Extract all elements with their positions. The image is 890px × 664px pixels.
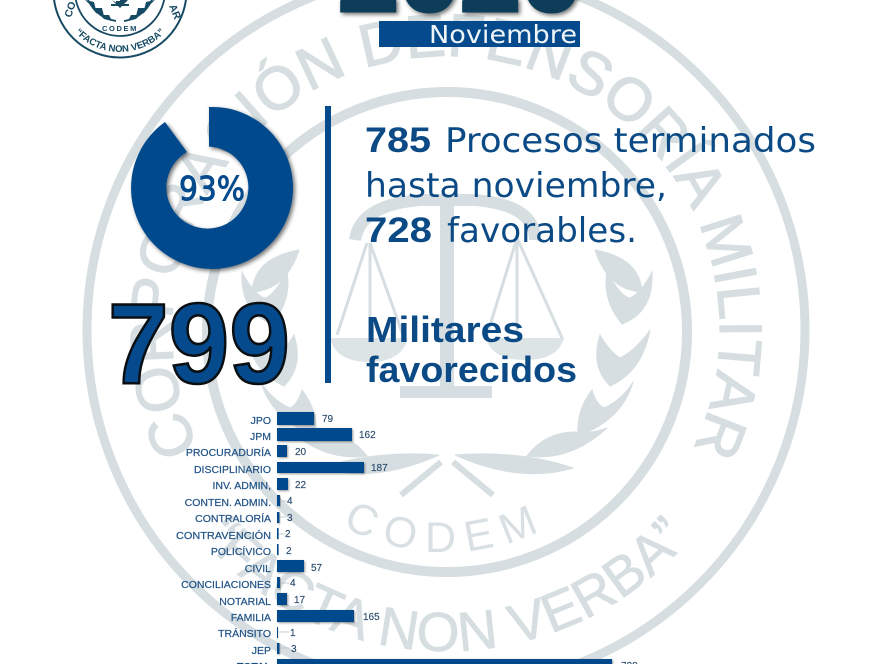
row Procuraduría: 20: [295, 447, 307, 458]
text block: militares favorecidos: Militares: [366, 309, 524, 350]
row Inv. Admin: 22: [295, 480, 307, 491]
logo seal top left: “FACTA NON VERBA”: [78, 28, 162, 52]
row Civil: 57: [311, 563, 323, 574]
row JPO: JPO: [251, 415, 271, 427]
logo seal top left: CO: [62, 0, 79, 19]
text block: militares favorecidos: favorecidos: [366, 349, 577, 390]
row JPO: 79: [322, 414, 334, 425]
logo seal top left: [53, 0, 187, 58]
row Conten. Admin: CONTEN. ADMIN.: [185, 497, 271, 509]
row Total: [237, 659, 638, 664]
row Tránsito: 1: [290, 628, 296, 639]
row Tránsito: [218, 627, 296, 640]
text block: procesos: Procesos terminados: [445, 121, 816, 161]
row Contravención: 2: [285, 529, 291, 540]
row JEP: 3: [291, 644, 297, 655]
row Policívico: POLICÍVICO: [211, 545, 271, 558]
row Tránsito: TRÁNSITO: [218, 627, 271, 640]
row Conten. Admin: 4: [287, 496, 293, 507]
text block: procesos: 728: [365, 211, 432, 250]
vertical divider: [325, 106, 331, 383]
row Disciplinario: DISCIPLINARIO: [194, 464, 271, 476]
text block: procesos: [365, 121, 816, 251]
row Familia: [231, 610, 380, 624]
row JPO: [251, 412, 334, 427]
row Notarial: 17: [294, 595, 306, 606]
text block: procesos: hasta noviembre,: [365, 166, 667, 206]
row Inv. Admin: [212, 478, 307, 492]
row JEP: JEP: [252, 645, 271, 657]
row Conciliaciones: CONCILIACIONES: [181, 579, 271, 591]
row Procuraduría: [186, 445, 307, 459]
row Contraloría: CONTRALORÍA: [195, 512, 271, 525]
row Contravención: [176, 528, 291, 542]
row Policívico: 2: [286, 546, 292, 557]
donut chart: 93%: [131, 107, 293, 269]
row Conciliaciones: [181, 577, 296, 591]
row JPM: 162: [359, 430, 376, 441]
text block: procesos: favorables.: [447, 211, 637, 251]
row JPM: [250, 428, 376, 443]
row Familia: FAMILIA: [231, 612, 271, 624]
month banner: [379, 20, 580, 49]
watermark: institutional seal: CODEM: [348, 504, 536, 552]
row Familia: 165: [363, 612, 380, 623]
donut chart: 93%: 93%: [179, 169, 245, 208]
row Conten. Admin: [185, 495, 293, 509]
row Notarial: [219, 593, 306, 608]
logo seal top left: CODEM: [102, 24, 138, 33]
watermark: institutional seal: CORPORACIÓN DEFENSORÍA MILITAR: [130, 14, 762, 458]
text block: militares favorecidos: [366, 309, 577, 390]
row Contravención: CONTRAVENCIÓN: [176, 529, 271, 542]
row Civil: CIVIL: [245, 563, 271, 575]
row Conciliaciones: 4: [290, 578, 296, 589]
month banner: Noviembre: [429, 20, 577, 49]
row Policívico: [211, 544, 292, 558]
row Notarial: NOTARIAL: [219, 596, 271, 608]
row Procuraduría: PROCURADURÍA: [186, 446, 271, 459]
row JEP: [252, 643, 297, 657]
logo seal top left: AR: [166, 3, 183, 22]
row JPM: JPM: [250, 431, 271, 443]
bar chart: procesos por jurisdicción: [176, 412, 638, 664]
text block: procesos: 785: [365, 121, 431, 160]
watermark: institutional seal: “FACTA NON VERBA”: [217, 514, 678, 652]
big number: militares favorecidos: 799: [108, 281, 290, 408]
row Disciplinario: 187: [371, 463, 388, 474]
row Disciplinario: [194, 462, 388, 476]
row Contraloría: 3: [287, 513, 293, 524]
row Inv. Admin: INV. ADMIN,: [212, 480, 271, 492]
row Civil: [245, 560, 323, 575]
